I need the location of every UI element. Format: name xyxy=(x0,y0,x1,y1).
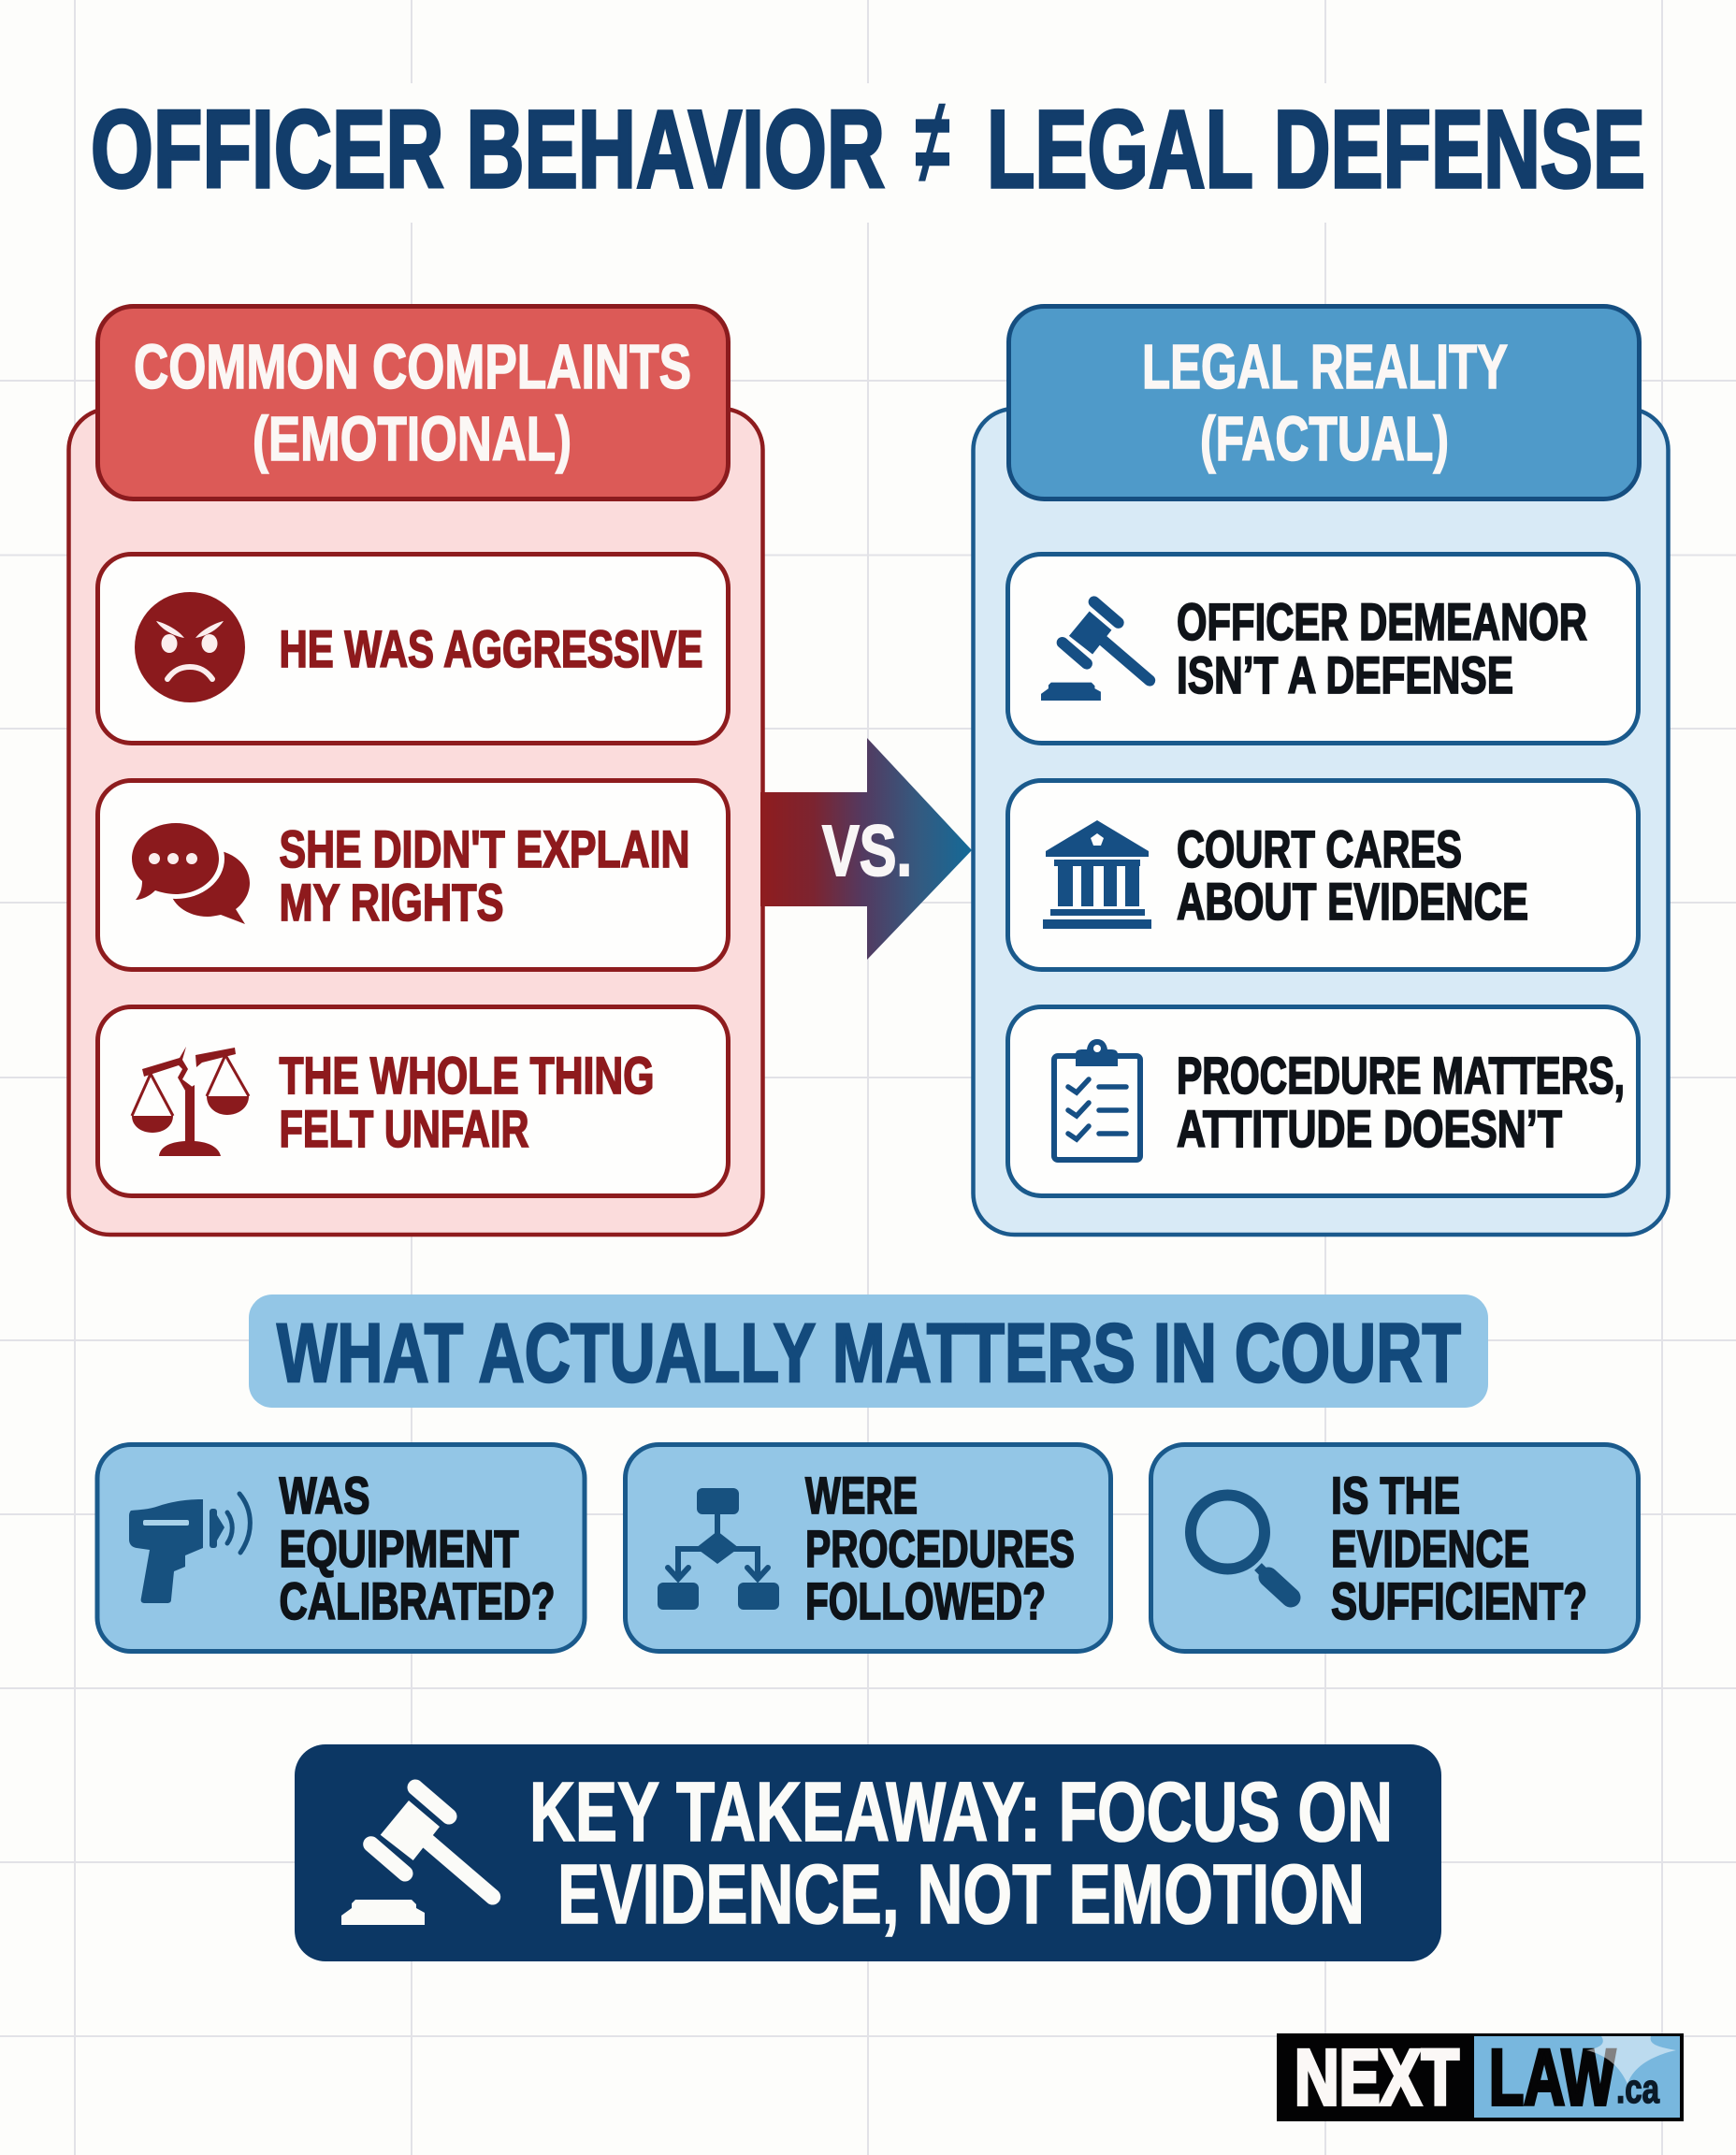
title: ≠ xyxy=(915,72,950,210)
icon: courthouse xyxy=(1043,820,1151,929)
text: is the evidence sufficient: EVIDENCE xyxy=(1331,1519,1529,1578)
text: were procedures followed: WERE xyxy=(805,1466,918,1525)
text: she didn't explain my rights: SHE DIDN'T EXPLAIN xyxy=(279,819,690,878)
panel: legal reality xyxy=(973,307,1669,1235)
icon: radar gun xyxy=(129,1494,250,1603)
text: he was aggressive: HE WAS AGGRESSIVE xyxy=(279,619,703,678)
text: the whole thing felt unfair: FELT UNFAIR xyxy=(279,1099,529,1158)
icon: flowchart xyxy=(658,1488,779,1610)
panel background: legal reality xyxy=(973,409,1669,1235)
complaint card: she didn't explain xyxy=(97,780,728,969)
panel background: complaints xyxy=(69,409,763,1235)
text: were procedures followed: PROCEDURES xyxy=(805,1519,1075,1578)
text: is the evidence sufficient: IS THE xyxy=(1331,1466,1460,1525)
heading: what actually matters in court xyxy=(249,1294,1488,1408)
reality card: officer demeanor xyxy=(1008,554,1639,743)
text: was equipment calibrated xyxy=(279,1466,556,1630)
logo: nextlaw.ca: NEXT xyxy=(1295,2033,1459,2121)
card: equipment calibrated xyxy=(97,1444,585,1652)
icon: speech bubbles xyxy=(127,818,250,924)
icon: clipboard checklist xyxy=(1054,1039,1140,1160)
heading: legal reality: LEGAL REALITY xyxy=(1142,332,1508,402)
heading: legal reality xyxy=(1008,307,1639,499)
text: she didn't explain my rights: MY RIGHTS xyxy=(279,873,503,932)
text: procedure matters, attitude doesn't xyxy=(1177,1046,1625,1158)
heading: legal reality: (FACTUAL) xyxy=(1200,404,1449,474)
text: was equipment calibrated: CALIBRATED? xyxy=(279,1571,556,1630)
text: officer demeanor isn't a defense xyxy=(1177,592,1587,704)
text: were procedures followed: FOLLOWED? xyxy=(805,1571,1046,1630)
icon: angry face xyxy=(135,592,245,702)
arrow: vs. xyxy=(760,738,972,960)
logo: nextlaw.ca xyxy=(1277,2033,1684,2121)
logo: nextlaw.ca: .ca xyxy=(1616,2066,1659,2112)
panel: common complaints xyxy=(69,307,763,1235)
complaint card: whole thing felt unfair xyxy=(97,1006,728,1195)
text: key takeaway xyxy=(529,1766,1393,1942)
text: she didn't explain my rights xyxy=(279,819,690,932)
callout: key takeaway xyxy=(295,1744,1441,1961)
text: the whole thing felt unfair: THE WHOLE THING xyxy=(279,1046,655,1105)
title xyxy=(91,72,1645,211)
text: court cares about evidence: COURT CARES xyxy=(1177,819,1462,878)
text: key takeaway: EVIDENCE, NOT EMOTION xyxy=(557,1848,1365,1942)
card: procedures followed xyxy=(625,1444,1111,1652)
text: court cares about evidence xyxy=(1177,819,1528,931)
card: evidence sufficient xyxy=(1150,1444,1639,1652)
heading: common complaints: COMMON COMPLAINTS xyxy=(134,332,691,402)
text: was equipment calibrated: WAS xyxy=(279,1466,370,1525)
icon: gavel xyxy=(1041,601,1150,701)
reality card: procedure matters xyxy=(1008,1006,1639,1195)
text: officer demeanor isn't a defense: OFFICER DEMEANOR xyxy=(1177,592,1587,651)
icon: magnifying glass xyxy=(1191,1495,1291,1598)
text: was equipment calibrated: EQUIPMENT xyxy=(279,1519,518,1578)
heading: common complaints xyxy=(97,307,728,499)
complaint card: he was aggressive xyxy=(97,554,728,743)
text: key takeaway: KEY TAKEAWAY: FOCUS ON xyxy=(529,1766,1393,1859)
text: the whole thing felt unfair xyxy=(279,1046,655,1158)
logo: nextlaw.ca: LAW xyxy=(1489,2033,1616,2121)
icon: gavel xyxy=(341,1787,493,1925)
text: procedure matters, attitude doesn't: ATTITUDE DOESN’T xyxy=(1177,1099,1562,1158)
text: officer demeanor isn't a defense: ISN’T A DEFENSE xyxy=(1177,645,1513,704)
arrow: vs.: VS. xyxy=(822,811,912,891)
text: is the evidence sufficient xyxy=(1331,1466,1587,1630)
reality card: court cares xyxy=(1008,780,1639,969)
text: court cares about evidence: ABOUT EVIDENCE xyxy=(1177,872,1528,931)
title: OFFICER BEHAVIOR xyxy=(91,88,885,211)
text: were procedures followed xyxy=(805,1466,1075,1630)
text: is the evidence sufficient: SUFFICIENT? xyxy=(1331,1571,1587,1630)
icon: broken scales xyxy=(132,1047,249,1156)
heading: common complaints: (EMOTIONAL) xyxy=(253,404,571,474)
